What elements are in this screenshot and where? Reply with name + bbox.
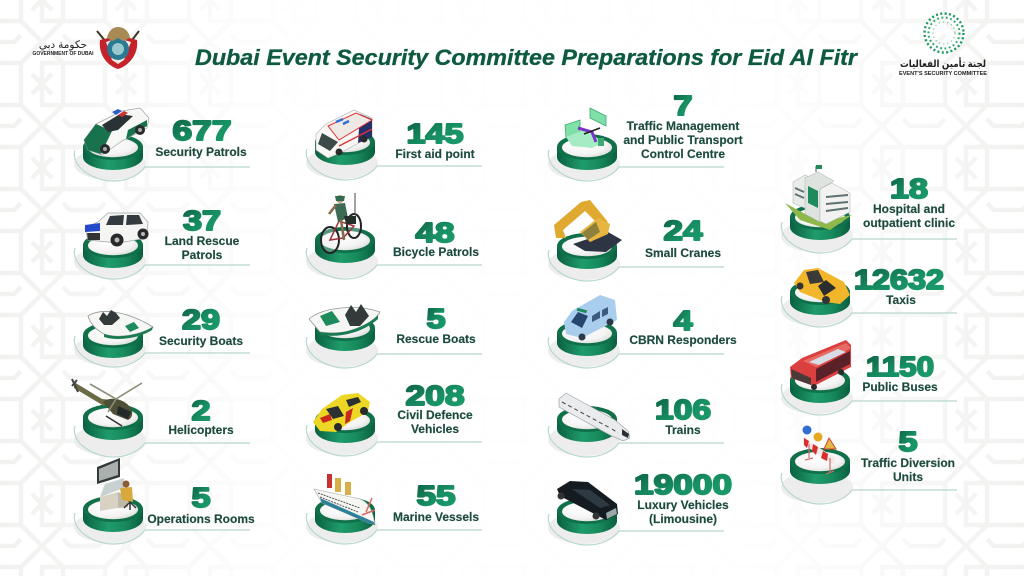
pedestal xyxy=(557,406,617,442)
item: 677 Security Patrols xyxy=(74,108,250,181)
label: Land Rescue xyxy=(165,234,240,248)
figure: 18 xyxy=(890,173,928,204)
item: 12632 Taxis xyxy=(781,264,957,327)
icon: ambulance xyxy=(316,110,372,158)
pedestal xyxy=(83,322,143,358)
item: 4 CBRN Responders xyxy=(548,295,737,368)
logo: Government of Dubai: حكومة دبي xyxy=(39,39,87,51)
pedestal xyxy=(790,204,850,240)
figure: 5 xyxy=(192,482,210,513)
figure: 1150 xyxy=(866,351,934,382)
pedestal xyxy=(83,134,143,170)
icon: hospital xyxy=(785,165,852,230)
label line 2: Patrols xyxy=(182,248,223,262)
figure: 29 xyxy=(182,304,220,335)
base arc and rule xyxy=(306,335,482,368)
base arc and rule xyxy=(781,220,957,253)
figure: 24 xyxy=(664,215,703,246)
figure: 677 xyxy=(172,115,232,146)
figure: 2 xyxy=(192,395,210,426)
label: Traffic Management xyxy=(627,119,739,133)
icon: cruise ship xyxy=(314,474,375,525)
pedestal xyxy=(83,496,143,532)
logo: Event's Security Committee: EVENT'S SECURITY COMMITTEE xyxy=(899,71,987,77)
icon: rescue SUV xyxy=(85,213,148,246)
base arc and rule xyxy=(306,511,482,544)
base arc and rule xyxy=(74,334,250,367)
item: 18 Hospital and outpatient clinic xyxy=(781,165,957,253)
item: 7 Traffic Management and Public Transport Control Centre xyxy=(548,90,743,181)
base arc and rule xyxy=(548,512,724,545)
icon: traffic barrier xyxy=(802,426,836,474)
pedestal xyxy=(557,233,617,269)
icon: taxi xyxy=(794,268,850,304)
base arc and rule xyxy=(74,424,250,457)
label: Marine Vessels xyxy=(393,510,479,524)
pedestal xyxy=(315,129,375,165)
item: 37 Land Rescue Patrols xyxy=(74,205,250,279)
icon: dotted ring xyxy=(924,14,964,52)
figure: 12632 xyxy=(854,264,944,295)
item: 5 Traffic Diversion Units xyxy=(781,426,957,504)
logo: Government of Dubai xyxy=(32,27,139,69)
pedestal xyxy=(83,232,143,268)
figure: 55 xyxy=(416,480,456,511)
label: Trains xyxy=(665,423,701,437)
base arc and rule xyxy=(74,246,250,279)
icon: limousine xyxy=(557,481,618,520)
base arc and rule xyxy=(306,246,482,279)
pedestal xyxy=(83,404,143,440)
figure: 7 xyxy=(674,90,692,121)
base arc and rule xyxy=(548,424,724,457)
icon: bullet train xyxy=(559,393,630,441)
icon: helicopter xyxy=(72,379,142,426)
base arc and rule xyxy=(548,335,724,368)
icon: civil defence car xyxy=(313,393,370,432)
item: 29 Security Boats xyxy=(74,304,250,367)
pedestal xyxy=(315,497,375,533)
icon: security boat xyxy=(88,310,153,339)
item: 2 Helicopters xyxy=(72,379,250,457)
icon: bicycle patrol xyxy=(321,193,361,253)
figure: 5 xyxy=(898,426,918,457)
figure: 4 xyxy=(674,305,693,336)
figure: 48 xyxy=(416,217,454,248)
label: Public Buses xyxy=(862,380,938,394)
item: 208 Civil Defence Vehicles xyxy=(306,380,482,456)
icon: Dubai emblem xyxy=(97,27,139,69)
logo: Government of Dubai: GOVERNMENT OF DUBAI xyxy=(32,51,94,57)
icon: police car xyxy=(84,108,149,155)
pedestal xyxy=(557,498,617,534)
label line 3: Control Centre xyxy=(641,147,725,161)
pedestal xyxy=(557,134,617,170)
pedestal xyxy=(790,279,850,315)
base arc and rule xyxy=(781,294,957,327)
base arc and rule xyxy=(548,248,724,281)
label: Security Boats xyxy=(159,334,243,348)
base arc and rule xyxy=(548,148,724,181)
label line 2: and Public Transport xyxy=(623,133,743,147)
pedestal xyxy=(315,407,375,443)
label: Small Cranes xyxy=(645,246,721,260)
logo: Event's Security Committee xyxy=(899,14,987,77)
label: Helicopters xyxy=(168,423,234,437)
pedestal xyxy=(557,320,617,356)
base arc and rule xyxy=(306,147,482,180)
base arc and rule xyxy=(306,423,482,456)
item: 145 First aid point xyxy=(306,110,482,180)
pedestal xyxy=(315,315,375,351)
label line 2: outpatient clinic xyxy=(863,216,955,230)
label: Rescue Boats xyxy=(396,332,476,346)
figure: 5 xyxy=(426,303,446,334)
label: Luxury Vehicles xyxy=(637,498,729,512)
label line 2: Units xyxy=(893,470,923,484)
pedestal xyxy=(790,367,850,403)
item: 5 Operations Rooms xyxy=(74,458,255,544)
logo: Event's Security Committee: لجنة تأمين الفعاليات xyxy=(900,57,986,70)
label: Bicycle Patrols xyxy=(393,245,479,259)
item: 24 Small Cranes xyxy=(548,200,724,281)
icon: control centre xyxy=(565,108,606,148)
figure: 19000 xyxy=(634,469,732,500)
icon: CBRN van xyxy=(564,295,617,340)
figure: 208 xyxy=(406,380,464,411)
item: 55 Marine Vessels xyxy=(306,474,482,544)
label: Operations Rooms xyxy=(147,512,255,526)
base arc and rule xyxy=(74,511,250,544)
title: Dubai Event Security Committee Preparations for Eid Al Fitr xyxy=(195,45,859,70)
base arc and rule xyxy=(74,148,250,181)
item: 106 Trains xyxy=(548,393,724,457)
figure: 145 xyxy=(406,118,464,149)
label: Civil Defence xyxy=(397,408,473,422)
pedestal xyxy=(315,227,375,263)
base arc and rule xyxy=(781,471,957,504)
label: CBRN Responders xyxy=(629,333,737,347)
item: 5 Rescue Boats xyxy=(306,303,482,368)
label: Security Patrols xyxy=(155,145,247,159)
item: 1150 Public Buses xyxy=(781,340,957,415)
label line 2: Vehicles xyxy=(411,422,459,436)
label: Hospital and xyxy=(873,202,945,216)
label: Traffic Diversion xyxy=(861,456,955,470)
label: Taxis xyxy=(886,293,916,307)
label: First aid point xyxy=(395,147,475,161)
icon: operations room xyxy=(97,458,136,511)
pedestal xyxy=(790,448,850,484)
figure: 37 xyxy=(183,205,221,236)
item: 48 Bicycle Patrols xyxy=(306,193,482,279)
label line 2: (Limousine) xyxy=(649,512,717,526)
figure: 106 xyxy=(655,394,711,425)
icon: excavator xyxy=(554,200,622,252)
base arc and rule xyxy=(781,382,957,415)
icon: red bus xyxy=(790,340,851,390)
icon: rescue boat xyxy=(309,304,380,336)
item: 19000 Luxury Vehicles (Limousine) xyxy=(548,469,732,545)
